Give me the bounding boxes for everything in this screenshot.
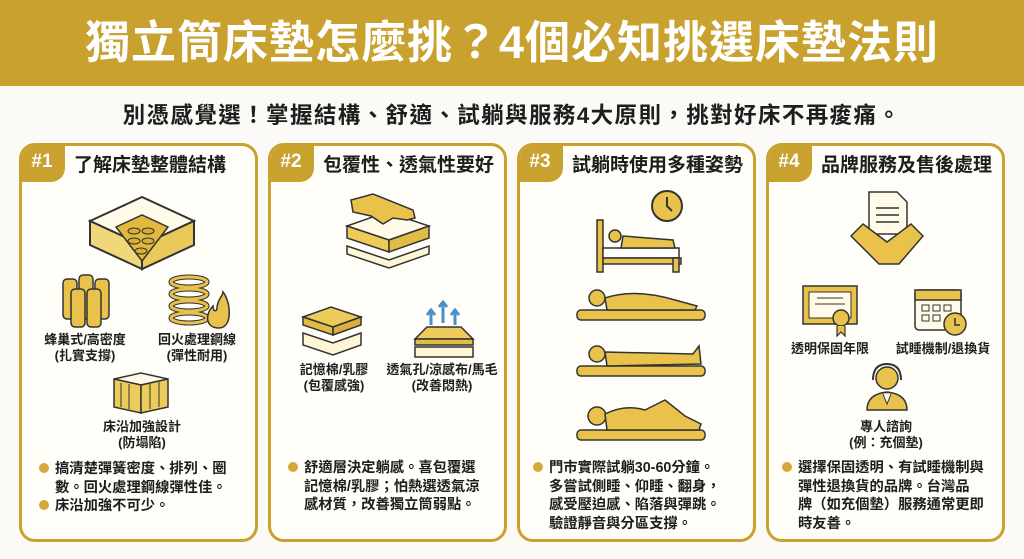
panel: 1 structure [19, 143, 258, 542]
label: honeycomb: 蜂巢式/高密度 [44, 332, 126, 347]
bullets 1 [39, 460, 227, 514]
label: warranty: 透明保固年限 [791, 341, 869, 356]
bullets 3: 多嘗試側睡、仰睡、翻身， [549, 478, 721, 494]
bullets 4: 牌（如充個墊）服務通常更即 [798, 497, 984, 513]
label: breathable: 透氣孔/涼感布/馬毛 [386, 362, 498, 377]
bullets 4: 時友善。 [798, 516, 855, 532]
badge 3: #3 [529, 151, 551, 172]
icon: edge support [113, 372, 169, 414]
icon: contract handshake [850, 191, 924, 265]
icon: rolling sleeper [576, 399, 706, 441]
heading 3: 試躺時使用多種姿勢 [572, 155, 743, 176]
badge 3 [517, 143, 563, 182]
icon: bed with sleeper [596, 219, 682, 273]
label: consultant: (例：充個墊) [849, 435, 923, 450]
badge 2 [268, 143, 314, 182]
bullets 3: 驗證靜音與分區支撐。 [549, 516, 692, 532]
badge 1: #1 [31, 151, 53, 172]
label: honeycomb: (扎實支撐) [55, 348, 115, 363]
bullets 4 [782, 460, 984, 532]
icon: side sleeper [576, 289, 706, 321]
icon: memory foam [301, 306, 363, 356]
icon: clock [651, 190, 683, 222]
bullets 1: 數。回火處理鋼線彈性佳。 [55, 480, 227, 496]
label: tempered wire: 回火處理鋼線 [158, 332, 236, 347]
icon: consultant [866, 363, 908, 411]
icon: warranty certificate [802, 285, 858, 338]
bullets 4: 選擇保固透明、有試睡機制與 [798, 460, 984, 476]
badge 2: #2 [280, 151, 302, 172]
label: honeycomb [44, 332, 126, 363]
badge 4 [766, 143, 812, 182]
icon: mattress cutaway [88, 196, 196, 271]
label: consultant: 專人諮詢 [860, 419, 912, 434]
bullets 1: 床沿加強不可少。 [55, 498, 169, 514]
bullets 3: 門市實際試躺30-60分鐘。 [549, 460, 714, 476]
bullets 2: 感材質，改善獨立筒弱點。 [304, 497, 476, 513]
panel: 4 service [766, 143, 1005, 542]
label: tempered wire: (彈性耐用) [167, 348, 227, 363]
heading 1: 了解床墊整體結構 [74, 155, 226, 176]
label: tempered wire [158, 332, 236, 363]
title band [0, 0, 1024, 86]
label: edge [103, 419, 181, 450]
icon: breathable vents [413, 300, 475, 358]
label: consultant [849, 419, 923, 450]
badge 1 [19, 143, 65, 182]
bullets 3: 感受壓迫感、陷落與彈跳。 [549, 497, 721, 513]
label: memory foam: 記憶棉/乳膠 [300, 362, 368, 377]
label: memory foam [300, 362, 368, 393]
label: memory foam: (包覆感強) [304, 378, 364, 393]
heading 2: 包覆性、透氣性要好 [323, 155, 494, 176]
badge 4: #4 [778, 151, 800, 172]
title: 獨立筒床墊怎麼挑？4個必知挑選床墊法則 [85, 17, 939, 68]
bullets 4: 彈性退換貨的品牌。台灣品 [798, 478, 970, 494]
icon: honeycomb springs [62, 274, 110, 328]
panel: 2 comfort [268, 143, 507, 542]
label: breathable [386, 362, 498, 393]
label: trial return: 試睡機制/退換貨 [896, 341, 990, 356]
bullets 2: 記憶棉/乳膠；怕熱選透氣涼 [304, 478, 480, 494]
bullets 1: 搞清楚彈簧密度、排列、圈 [55, 461, 227, 477]
icon: hand pressing layers [344, 193, 432, 269]
heading 4: 品牌服務及售後處理 [821, 155, 992, 176]
icon: calendar clock [914, 289, 967, 336]
subtitle: 別憑感覺選！掌握結構、舒適、試躺與服務4大原則，挑對好床不再痠痛。 [123, 103, 901, 128]
label: edge: (防塌陷) [118, 435, 166, 450]
panel: 3 trial [517, 143, 756, 542]
icon: back sleeper [576, 344, 706, 377]
bullets 2: 舒適層決定躺感。喜包覆選 [304, 460, 476, 476]
icon: tempered spring with flame [168, 274, 230, 329]
label: edge: 床沿加強設計 [103, 419, 181, 434]
bullets 3 [533, 460, 721, 532]
bullets 2 [288, 459, 480, 513]
label: breathable: (改善悶熱) [412, 378, 472, 393]
